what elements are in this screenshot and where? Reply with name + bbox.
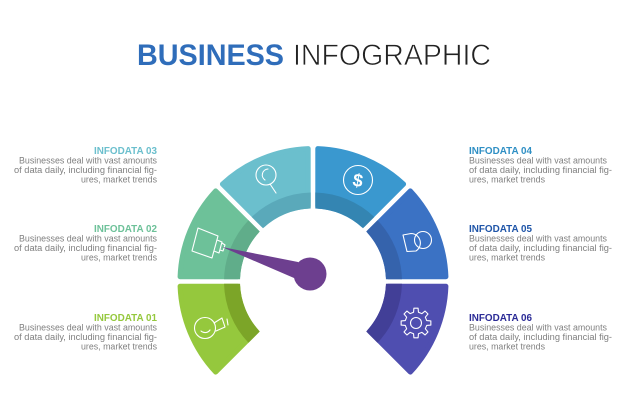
text block: infodata 02: INFODATA 02 (94, 223, 157, 235)
text block: infodata 06: INFODATA 06 (469, 312, 532, 324)
segment 03 (222, 149, 311, 228)
icon: dollar coin: $ (351, 170, 365, 191)
text block: infodata 01: INFODATA 01 (94, 312, 157, 324)
text block: infodata 02: ures, market trends (81, 252, 157, 262)
segment 05 (366, 191, 446, 279)
text block: infodata 06: Businesses deal with vast amounts (469, 322, 607, 332)
text block: infodata 03 (14, 145, 157, 184)
text block: infodata 05: of data daily, including financial fig- (469, 243, 612, 253)
text block: infodata 02: of data daily, including financial fig- (14, 243, 157, 253)
icon: magnifier (256, 165, 276, 193)
icon: light bulb (194, 318, 228, 338)
text block: infodata 05 (469, 223, 612, 262)
icon: D and O shapes (403, 232, 432, 252)
gauge: six segments (180, 149, 446, 372)
text block: infodata 02: Businesses deal with vast amounts (19, 234, 157, 244)
title: INFOGRAPHIC (293, 39, 491, 72)
text block: infodata 06: ures, market trends (469, 342, 545, 352)
text block: infodata 05: INFODATA 05 (469, 223, 532, 235)
text block: infodata 04: Businesses deal with vast amounts (469, 156, 607, 166)
text block: infodata 06 (469, 312, 612, 352)
text block: infodata 05: ures, market trends (469, 252, 545, 262)
text block: infodata 06: of data daily, including financial fig- (469, 332, 612, 342)
text block: infodata 04: INFODATA 04 (469, 145, 532, 157)
text block: infodata 04: of data daily, including financial fig- (469, 165, 612, 175)
icon: gear (401, 308, 431, 338)
segment 04 (315, 149, 404, 228)
text block: infodata 04 (469, 145, 612, 184)
icon: dollar coin (344, 166, 372, 194)
segment 06 (366, 284, 446, 372)
segment 02 (180, 191, 260, 279)
text block: infodata 01 (14, 312, 157, 352)
text block: infodata 03: Businesses deal with vast amounts (19, 156, 157, 166)
title (137, 39, 491, 72)
text block: infodata 02 (14, 223, 157, 262)
title: BUSINESS (137, 39, 284, 72)
text block: infodata 05: Businesses deal with vast amounts (469, 234, 607, 244)
text block: infodata 01: of data daily, including financial fig- (14, 332, 157, 342)
text block: infodata 01: ures, market trends (81, 342, 157, 352)
text block: infodata 01: Businesses deal with vast amounts (19, 322, 157, 332)
text block: infodata 03: ures, market trends (81, 174, 157, 184)
text block: infodata 03: INFODATA 03 (94, 145, 157, 157)
segment 01 (180, 284, 260, 372)
gauge needle (222, 247, 326, 290)
text block: infodata 03: of data daily, including financial fig- (14, 165, 157, 175)
icon: monitor (192, 228, 225, 258)
text block: infodata 04: ures, market trends (469, 174, 545, 184)
